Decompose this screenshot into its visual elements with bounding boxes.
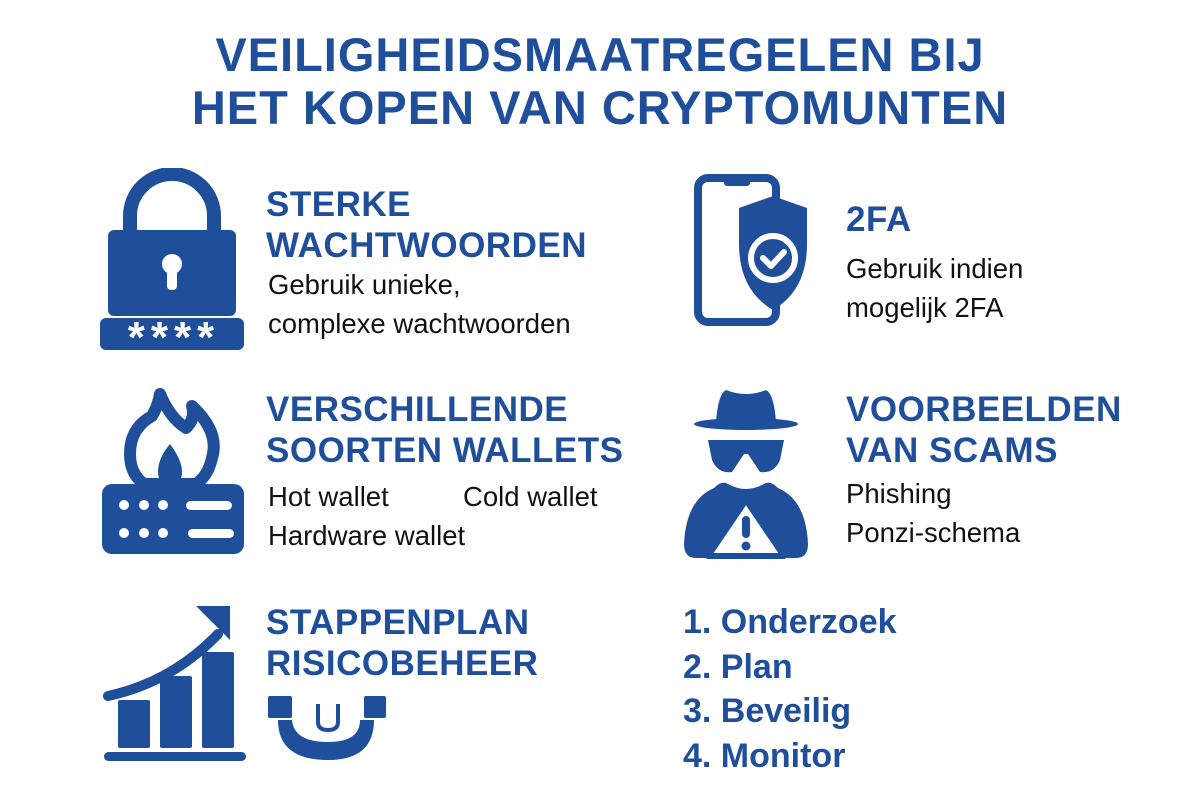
heading: scams: VAN SCAMS <box>846 431 1058 470</box>
title: VEILIGHEIDSMAATREGELEN BIJ <box>215 28 985 81</box>
heading: stappenplan: RISICOBEHEER <box>266 644 538 683</box>
numbered steps: 4. Monitor <box>683 736 845 774</box>
text: sterke wachtwoorden <box>268 269 571 339</box>
text: sterke wachtwoorden: Gebruik unieke, <box>268 269 461 300</box>
text: scams: Phishing <box>846 478 952 509</box>
text: wallets: Cold wallet <box>463 481 598 512</box>
icon: magnet <box>268 696 386 760</box>
title: HET KOPEN VAN CRYPTOMUNTEN <box>192 81 1008 134</box>
icon: lock <box>100 168 244 352</box>
heading: wallets <box>266 390 624 470</box>
heading: wallets: SOORTEN WALLETS <box>266 431 624 470</box>
text: scams <box>846 478 1020 548</box>
icon: wallet server with flame <box>102 388 244 554</box>
text: 2FA <box>846 253 1023 323</box>
heading: stappenplan <box>266 603 538 683</box>
text: wallets: Hot wallet <box>268 481 389 512</box>
numbered steps: 1. Onderzoek <box>683 603 897 641</box>
numbered steps <box>683 603 897 774</box>
numbered steps: 2. Plan <box>683 648 793 686</box>
heading: sterke wachtwoorden: STERKE <box>266 185 411 224</box>
heading: sterke wachtwoorden <box>266 185 587 265</box>
heading: stappenplan: STAPPENPLAN <box>266 603 530 642</box>
text: wallets <box>268 481 598 551</box>
heading: scams <box>846 390 1122 470</box>
text: 2FA: mogelijk 2FA <box>846 292 1003 323</box>
heading: sterke wachtwoorden: WACHTWOORDEN <box>266 226 587 265</box>
text: scams: Ponzi-schema <box>846 517 1020 548</box>
icon: growth chart <box>103 606 246 761</box>
title <box>192 28 1008 134</box>
icon: scammer <box>684 390 808 559</box>
text: wallets: Hardware wallet <box>268 520 465 551</box>
icon: phone with shield <box>694 174 807 326</box>
numbered steps: 3. Beveilig <box>683 692 851 730</box>
heading: scams: VOORBEELDEN <box>846 390 1122 429</box>
text: 2FA: Gebruik indien <box>846 253 1023 284</box>
heading: wallets: VERSCHILLENDE <box>266 390 568 429</box>
text: sterke wachtwoorden: complexe wachtwoorden <box>268 308 571 339</box>
heading: 2FA: 2FA <box>846 200 912 239</box>
